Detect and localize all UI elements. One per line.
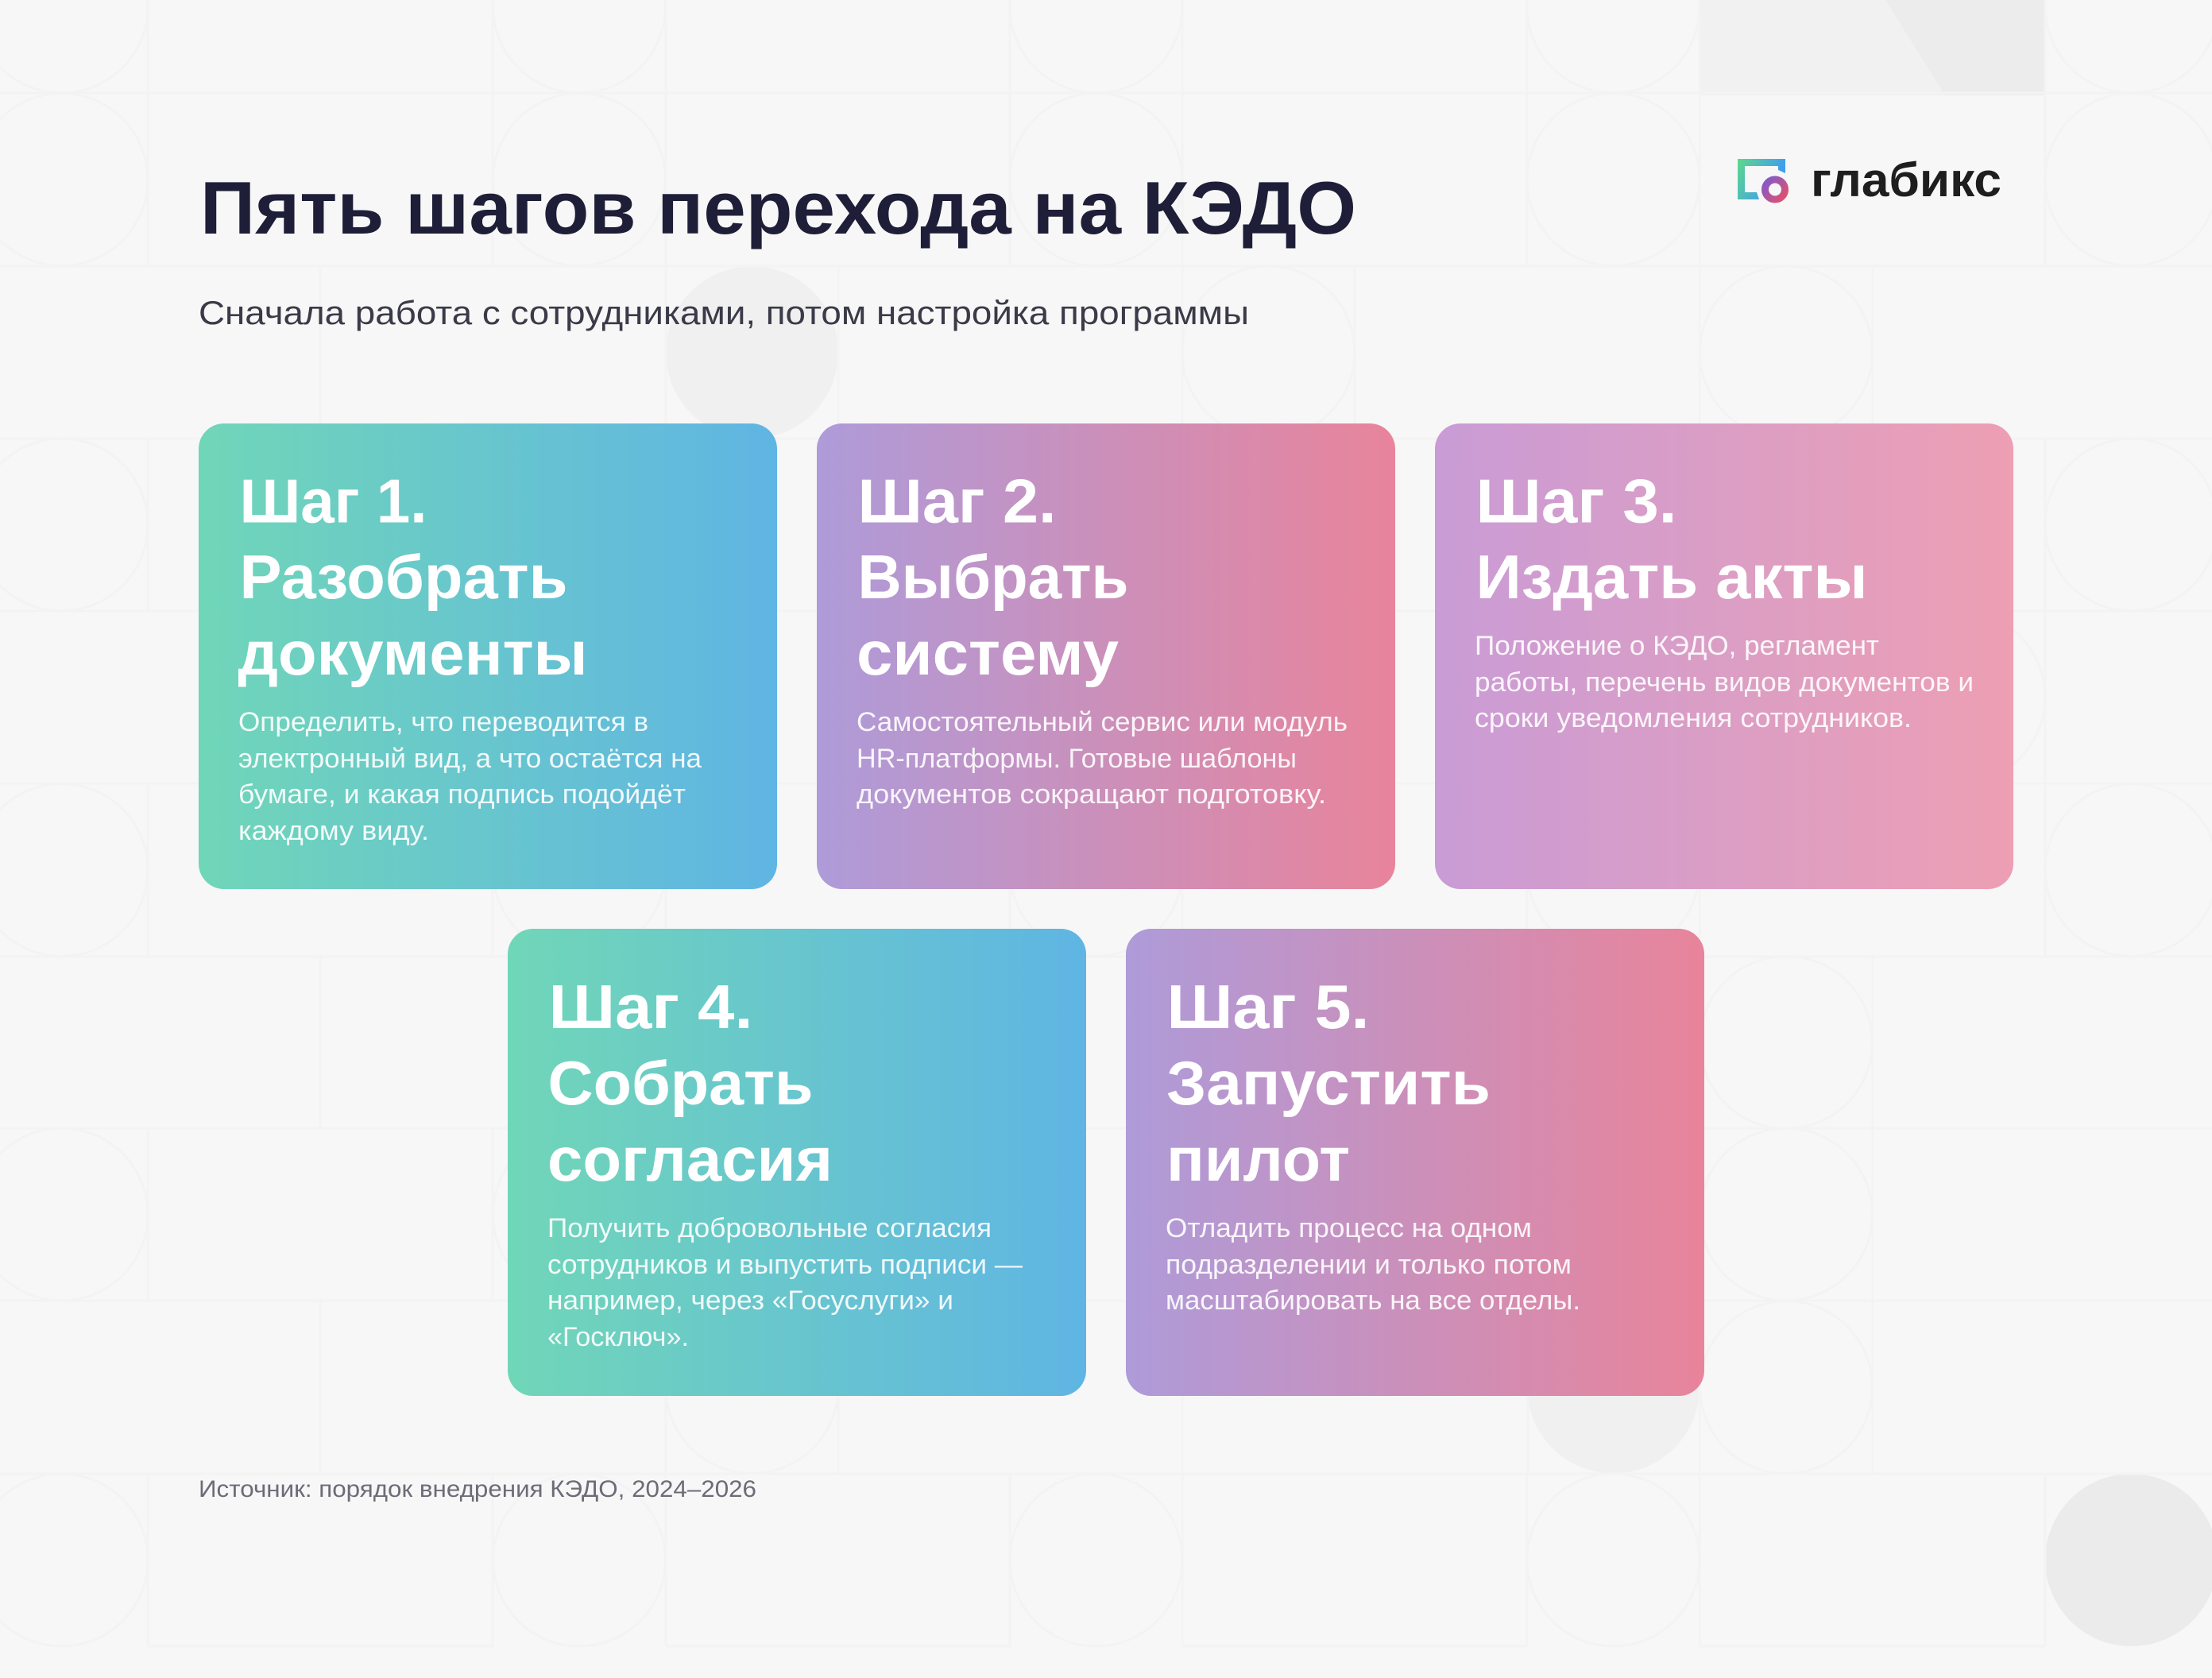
text: step 5 description: [1166, 1213, 1580, 1316]
panel: step 1: [199, 423, 777, 889]
logo wordmark: глабикс: [1811, 153, 2001, 207]
heading: step 2: систему: [857, 618, 1119, 688]
text: step 1 description: каждому виду.: [238, 816, 429, 846]
text: step 1 description: электронный вид, а что остаётся на: [238, 744, 702, 774]
heading: step 5: Запустить: [1166, 1048, 1491, 1118]
heading: step 2: Шаг 2.: [858, 466, 1057, 535]
logo: глабикс: [1738, 153, 2001, 207]
text: step 1 description: [238, 707, 702, 846]
heading: step 4: [547, 972, 833, 1194]
heading: step 3: Шаг 3.: [1476, 466, 1676, 535]
text: step 3 description: Положение о КЭДО, регламент: [1475, 631, 1879, 661]
heading: step 4: согласия: [547, 1124, 833, 1194]
panel: step 3: [1435, 423, 2013, 889]
heading: step 5: пилот: [1166, 1124, 1350, 1194]
text: step 4 description: [547, 1213, 1023, 1352]
heading: step 3: Издать акты: [1476, 542, 1867, 612]
text: step 5 description: масштабировать на все отделы.: [1166, 1286, 1580, 1316]
heading: step 1: Шаг 1.: [240, 466, 427, 535]
text: step 5 description: подразделении и только потом: [1166, 1250, 1572, 1280]
text: step 2 description: документов сокращают подготовку.: [857, 779, 1326, 810]
heading: step 2: [857, 466, 1128, 688]
text: step 2 description: HR-платформы. Готовые шаблоны: [857, 744, 1297, 774]
heading: step 3: [1476, 466, 1867, 612]
heading: step 5: Шаг 5.: [1166, 972, 1370, 1042]
heading: step 4: Собрать: [548, 1048, 814, 1118]
text: step 1 description: бумаге, и какая подпись подойдёт: [238, 779, 686, 810]
panel: step 5: [1126, 929, 1704, 1396]
icon: logo ring: [1765, 180, 1785, 199]
source note: Источник: порядок внедрения КЭДО, 2024–2026: [199, 1476, 756, 1502]
heading: step 5: [1166, 972, 1491, 1194]
text: step 4 description: Получить добровольные согласия: [547, 1213, 992, 1243]
text: step 4 description: «Госключ».: [547, 1322, 689, 1352]
text: step 2 description: Самостоятельный сервис или модуль: [857, 707, 1348, 737]
panel: step 4: [508, 929, 1086, 1396]
text: step 5 description: Отладить процесс на одном: [1166, 1213, 1532, 1243]
icon: logo frame: [1738, 159, 1785, 199]
subtitle: Сначала работа с сотрудниками, потом настройка программы: [199, 294, 1249, 331]
heading: step 4: Шаг 4.: [548, 972, 753, 1042]
text: step 3 description: [1475, 631, 1974, 733]
panel: step 2: [817, 423, 1395, 889]
heading: step 1: [238, 466, 588, 688]
text: step 4 description: сотрудников и выпустить подписи —: [547, 1250, 1023, 1280]
text: step 3 description: сроки уведомления сотрудников.: [1475, 703, 1912, 733]
text: step 3 description: работы, перечень видов документов и: [1475, 667, 1974, 698]
text: step 4 description: например, через «Госуслуги» и: [547, 1286, 953, 1316]
text: step 1 description: Определить, что переводится в: [238, 707, 648, 737]
heading: step 1: Разобрать: [240, 542, 567, 612]
text: step 2 description: [857, 707, 1348, 810]
title: Пять шагов перехода на КЭДО: [200, 166, 1356, 249]
heading: step 2: Выбрать: [858, 542, 1128, 612]
heading: step 1: документы: [238, 618, 588, 688]
